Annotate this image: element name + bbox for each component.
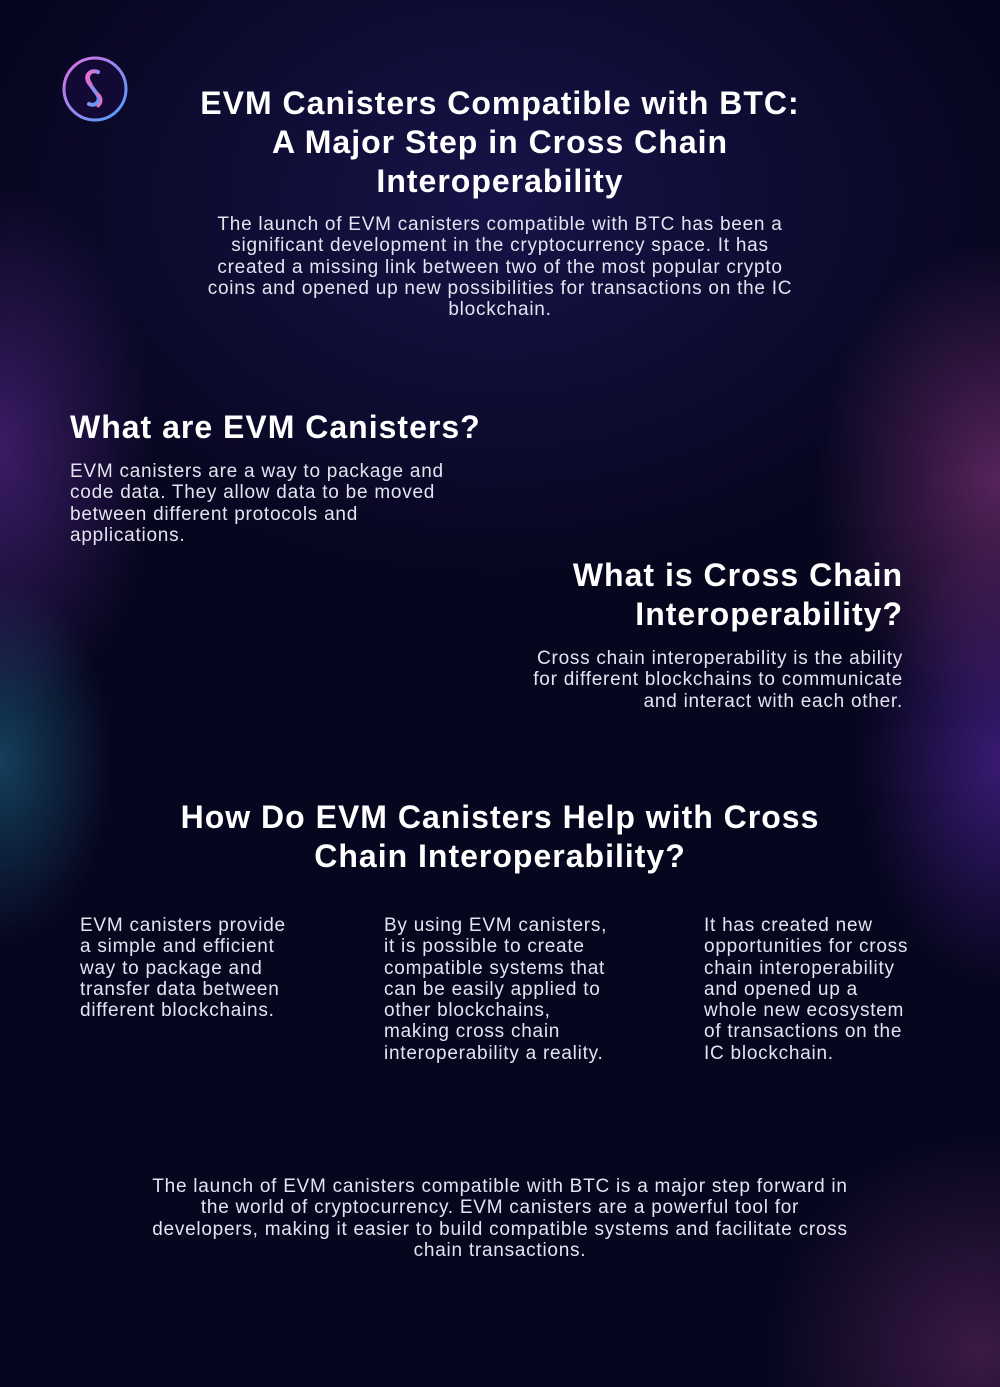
intro text: significant development in the cryptocurrency space. It has xyxy=(231,235,769,256)
title: A Major Step in Cross Chain xyxy=(272,124,728,160)
conclusion: chain transactions. xyxy=(414,1240,586,1261)
column 2: other blockchains, xyxy=(384,1000,551,1021)
column 2: interoperability a reality. xyxy=(384,1043,604,1064)
column 1: a simple and efficient xyxy=(80,936,275,957)
intro text: blockchain. xyxy=(448,299,552,320)
intro text: coins and opened up new possibilities for transactions on the IC xyxy=(208,278,792,299)
icon: logo xyxy=(62,56,128,122)
column 2: By using EVM canisters, xyxy=(384,915,607,936)
column 3: IC blockchain. xyxy=(704,1043,834,1064)
text: EVM canisters: applications. xyxy=(70,525,185,546)
column 3: of transactions on the xyxy=(704,1021,902,1042)
column 3: and opened up a xyxy=(704,979,858,1000)
column 1 xyxy=(80,915,286,1021)
column 2 xyxy=(384,915,607,1064)
intro text xyxy=(208,214,792,320)
text: EVM canisters: between different protocols and xyxy=(70,504,358,525)
conclusion: The launch of EVM canisters compatible with BTC is a major step forward in xyxy=(152,1176,848,1197)
column 2: it is possible to create xyxy=(384,936,585,957)
heading: cross chain: What is Cross Chain xyxy=(573,557,903,593)
text: cross chain: and interact with each other. xyxy=(644,691,903,712)
title: EVM Canisters Compatible with BTC: xyxy=(200,85,800,121)
column 1: way to package and xyxy=(80,958,263,979)
title xyxy=(200,85,800,199)
conclusion xyxy=(152,1176,848,1261)
heading: how: Chain Interoperability? xyxy=(314,838,686,874)
column 3: whole new ecosystem xyxy=(704,1000,904,1021)
intro text: created a missing link between two of the most popular crypto xyxy=(217,257,783,278)
text: EVM canisters: EVM canisters are a way to package and xyxy=(70,461,444,482)
conclusion: developers, making it easier to build compatible systems and facilitate cross xyxy=(152,1219,848,1240)
text: cross chain: for different blockchains to communicate xyxy=(533,669,903,690)
heading: how: How Do EVM Canisters Help with Cross xyxy=(181,799,819,835)
title: Interoperability xyxy=(376,163,624,199)
column 3: opportunities for cross xyxy=(704,936,908,957)
text: cross chain xyxy=(533,648,903,712)
heading: how xyxy=(181,799,819,874)
column 2: making cross chain xyxy=(384,1021,560,1042)
intro text: The launch of EVM canisters compatible with BTC has been a xyxy=(217,214,783,235)
heading: cross chain xyxy=(572,557,903,632)
text: EVM canisters: code data. They allow data to be moved xyxy=(70,482,435,503)
text: cross chain: Cross chain interoperability is the ability xyxy=(537,648,903,669)
column 3 xyxy=(704,915,908,1064)
column 1: different blockchains. xyxy=(80,1000,275,1021)
heading: what are EVM canisters: What are EVM Canisters? xyxy=(70,409,481,445)
column 2: can be easily applied to xyxy=(384,979,601,1000)
heading: cross chain: Interoperability? xyxy=(635,596,903,632)
conclusion: the world of cryptocurrency. EVM canisters are a powerful tool for xyxy=(201,1197,799,1218)
column 1: transfer data between xyxy=(80,979,280,1000)
column 3: It has created new xyxy=(704,915,873,936)
column 2: compatible systems that xyxy=(384,958,605,979)
column 1: EVM canisters provide xyxy=(80,915,286,936)
column 3: chain interoperability xyxy=(704,958,895,979)
text: EVM canisters xyxy=(70,461,444,546)
